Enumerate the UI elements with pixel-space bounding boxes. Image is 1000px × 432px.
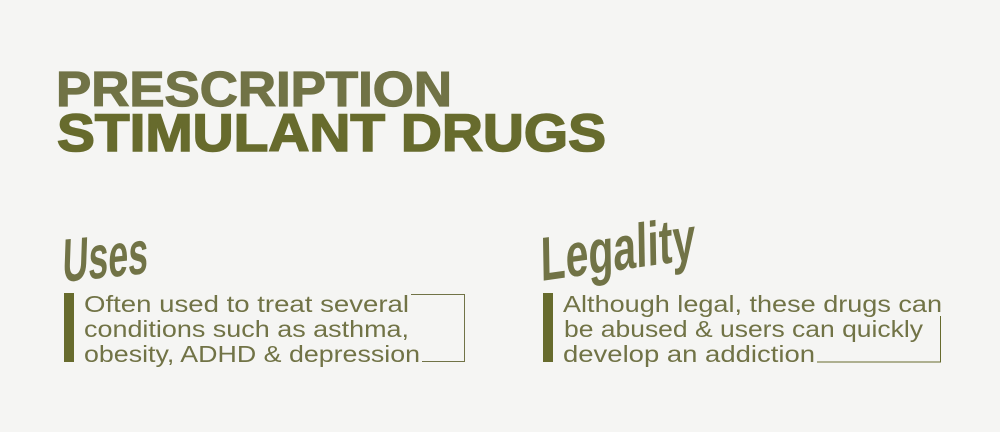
- uses text block: conditions such as asthma,: [84, 316, 409, 342]
- uses text block: Often used to treat several: [84, 291, 409, 317]
- legality text block: [563, 291, 942, 367]
- legality text block: be abused & users can quickly: [564, 316, 924, 342]
- panel: uses: [62, 218, 464, 367]
- title line 1: PRESCRIPTION: [56, 63, 452, 117]
- uses text block: [84, 291, 420, 367]
- title line 2: STIMULANT DRUGS: [57, 104, 606, 163]
- accent bar: [543, 293, 553, 362]
- heading: legality: Legality: [540, 204, 696, 295]
- heading: uses: Uses: [62, 218, 149, 296]
- title: [56, 63, 606, 163]
- panel: legality: [540, 204, 942, 367]
- accent bar: [64, 293, 74, 362]
- uses text block: obesity, ADHD & depression: [84, 341, 420, 367]
- bracket frame: [411, 294, 464, 362]
- legality text block: Although legal, these drugs can: [563, 291, 942, 317]
- legality text block: develop an addiction: [563, 341, 815, 367]
- bracket frame: [817, 316, 940, 362]
